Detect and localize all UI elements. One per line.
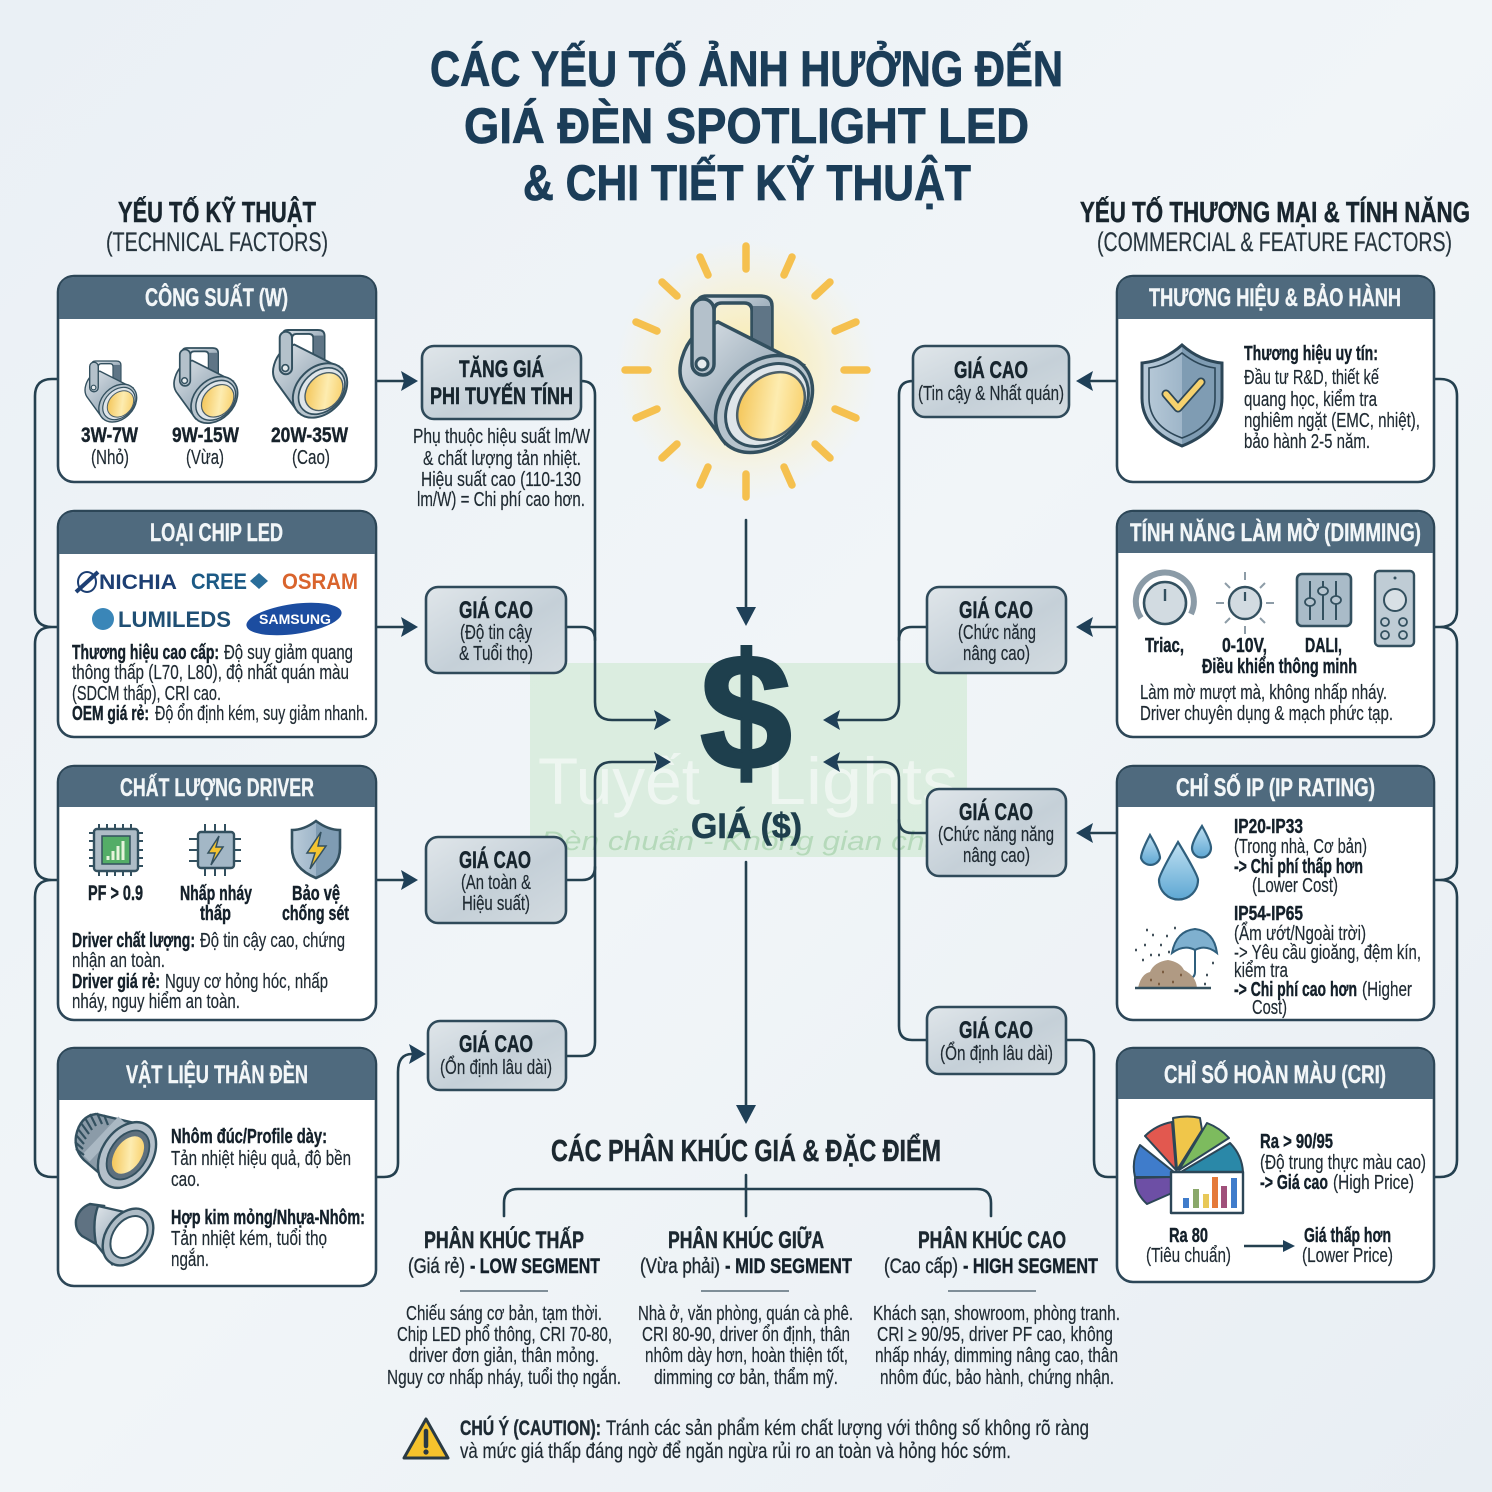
panel header: IP bbox=[1118, 767, 1433, 807]
panel: vật liệu thân đèn bbox=[58, 1048, 376, 1286]
badge: giá cao, chức năng: GIÁ CAO bbox=[959, 596, 1033, 624]
badge: giá cao, chức năng năng: GIÁ CAO bbox=[959, 798, 1033, 826]
IP description: (Ẩm ướt/Ngoài trời) bbox=[1234, 922, 1366, 945]
connector: right panels bus bbox=[1434, 379, 1457, 1177]
segment tree connector bbox=[504, 1175, 991, 1216]
segment: low: Nguy cơ nhấp nháy, tuổi thọ ngắn. bbox=[387, 1366, 621, 1389]
icon: thin alloy body bbox=[76, 1199, 164, 1275]
arrows: right panels to badges bbox=[1076, 371, 1117, 843]
icon: umbrella, dust and mound bbox=[1135, 928, 1217, 988]
wattage labels: (Cao) bbox=[292, 447, 330, 469]
driver description: Driver chất lượng: bbox=[72, 930, 195, 952]
panel: chất lượng driver bbox=[58, 766, 376, 1020]
brand description: Thương hiệu uy tín: bbox=[1244, 343, 1378, 365]
driver description: nhận an toàn. bbox=[72, 950, 165, 972]
heading: commercial and feature factors bbox=[1080, 195, 1470, 257]
badge: giá cao, chức năng năng: (Chức năng năng bbox=[938, 824, 1054, 846]
IP description: Cost) bbox=[1252, 997, 1287, 1019]
text: wattage note: Phụ thuộc hiệu suất lm/W bbox=[413, 426, 590, 448]
brand logos: OSRAM bbox=[282, 569, 358, 594]
icon: small spotlight bbox=[85, 361, 144, 430]
price symbol and label: $ bbox=[700, 620, 792, 804]
segment: low: Chip LED phổ thông, CRI 70-80, bbox=[397, 1324, 612, 1346]
icon: main spotlight with rays bbox=[616, 240, 876, 500]
segment: low: Chiếu sáng cơ bản, tạm thời. bbox=[406, 1303, 602, 1325]
dimming labels bbox=[1145, 635, 1357, 678]
caution text: CHÚ Ý (CAUTION): bbox=[460, 1416, 601, 1440]
icon: die-cast aluminium body bbox=[75, 1111, 168, 1199]
heading: price segments: CÁC PHÂN KHÚC GIÁ & ĐẶC ĐIỂM bbox=[551, 1132, 941, 1168]
segment: high: - HIGH SEGMENT bbox=[963, 1255, 1098, 1278]
brand logos: CREE bbox=[191, 569, 247, 594]
segment: high: PHÂN KHÚC CAO bbox=[918, 1226, 1066, 1254]
panel header: vật liệu: VẬT LIỆU THÂN ĐÈN bbox=[126, 1059, 308, 1089]
material description: Tản nhiệt kém, tuổi thọ bbox=[171, 1228, 327, 1250]
material description: ngắn. bbox=[171, 1248, 209, 1271]
badge: giá cao, chức năng: (Chức năng bbox=[958, 622, 1036, 644]
segment: mid: - MID SEGMENT bbox=[725, 1255, 852, 1278]
wattage labels: 3W-7W bbox=[81, 424, 138, 447]
driver description: Nguy cơ hỏng hóc, nhấp bbox=[165, 971, 328, 993]
dimming description: Làm mờ mượt mà, không nhấp nháy. bbox=[1140, 682, 1387, 704]
price symbol and label bbox=[691, 620, 802, 846]
IP description: (Higher bbox=[1362, 979, 1412, 1001]
IP description: kiểm tra bbox=[1234, 960, 1289, 982]
IP description: -> Yêu cầu gioăng, đệm kín, bbox=[1234, 942, 1421, 964]
driver feature labels: PF > 0.9 bbox=[88, 882, 143, 905]
chip description: (SDCM thấp), CRI cao. bbox=[72, 683, 221, 705]
badge: giá cao, chức năng: nâng cao) bbox=[963, 643, 1030, 665]
CRI description: (Độ trung thực màu cao) bbox=[1260, 1152, 1426, 1174]
badge: giá cao, an toàn bbox=[426, 837, 566, 923]
badge: giá cao, ổn định bbox=[428, 1021, 566, 1090]
panel header: CRI: CHỈ SỐ HOÀN MÀU (CRI) bbox=[1164, 1059, 1386, 1089]
heading: technical factors: (TECHNICAL FACTORS) bbox=[106, 227, 328, 257]
dimming labels: DALI, bbox=[1305, 635, 1342, 657]
Ra 80 comparison: (Lower Price) bbox=[1302, 1245, 1393, 1267]
material description: Tản nhiệt hiệu quả, độ bền bbox=[171, 1148, 351, 1170]
driver description: Driver giá rẻ: bbox=[72, 971, 160, 993]
segment: mid bbox=[638, 1226, 853, 1389]
brand description: bảo hành 2-5 năm. bbox=[1244, 431, 1370, 453]
chip description: Độ suy giảm quang bbox=[224, 642, 353, 664]
panel header: vật liệu bbox=[59, 1049, 375, 1100]
text: wattage note: Hiệu suất cao (110-130 bbox=[421, 469, 581, 491]
segment: high: (Cao cấp) bbox=[884, 1255, 958, 1278]
badge: giá cao, an toàn: (An toàn & bbox=[461, 872, 531, 894]
panel: chỉ số hoàn màu bbox=[1117, 1048, 1434, 1282]
panel: loại chip LED bbox=[58, 511, 376, 737]
badge: giá cao, ổn định: GIÁ CAO bbox=[459, 1030, 533, 1058]
badge: giá cao, ổn định: (Ổn định lâu dài) bbox=[440, 1055, 552, 1079]
segment: mid: CRI 80-90, driver ổn định, thân bbox=[642, 1324, 850, 1346]
icon: surge protection shield bbox=[292, 821, 340, 878]
IP description: -> Chi phí cao hơn bbox=[1234, 979, 1357, 1001]
dimming description: Driver chuyên dụng & mạch phức tạp. bbox=[1140, 703, 1393, 725]
title: GIÁ ĐÈN SPOTLIGHT LED bbox=[464, 98, 1029, 154]
icon: PF chip bbox=[89, 824, 143, 876]
icon: large spotlight bbox=[273, 330, 358, 428]
watermark: Tuyết Lights: Đèn chuẩn - Không gian chất bbox=[541, 826, 953, 856]
icon: shield with check bbox=[1142, 345, 1222, 446]
driver description: nháy, nguy hiểm an toàn. bbox=[72, 991, 240, 1013]
segment: low: (Giá rẻ) bbox=[408, 1255, 465, 1278]
watermark: Tuyết Lights: Tuyết bbox=[538, 744, 700, 818]
badge: tăng giá phi tuyến tính: TĂNG GIÁ bbox=[459, 355, 544, 383]
badge: giá cao, ổn định right: GIÁ CAO bbox=[959, 1016, 1033, 1044]
text: wattage note bbox=[413, 426, 590, 511]
badge: tăng giá phi tuyến tính bbox=[422, 346, 581, 419]
brand description bbox=[1244, 343, 1420, 453]
panel header: CRI bbox=[1118, 1049, 1433, 1099]
IP description: (Trong nhà, Cơ bản) bbox=[1234, 836, 1367, 858]
panel header: driver: CHẤT LƯỢNG DRIVER bbox=[120, 773, 314, 802]
price symbol and label: GIÁ ($) bbox=[691, 806, 802, 846]
caution text: Tránh các sản phẩm kém chất lượng với thông số không rõ ràng bbox=[606, 1417, 1089, 1440]
icon: water drops bbox=[1141, 826, 1211, 900]
badge: giá cao, độ tin cậy: & Tuổi thọ) bbox=[459, 643, 533, 665]
brand logos: NICHIA bbox=[99, 571, 177, 594]
panel header: driver bbox=[59, 767, 375, 807]
arrow: spotlight to price bbox=[736, 520, 756, 626]
title bbox=[430, 40, 1063, 211]
badge: tăng giá phi tuyến tính: PHI TUYẾN TÍNH bbox=[430, 382, 573, 410]
badge: giá cao, tin cậy và nhất quán: (Tin cậy & Nhất quán) bbox=[918, 383, 1064, 405]
badge: giá cao, tin cậy và nhất quán bbox=[913, 346, 1069, 417]
badge: giá cao, độ tin cậy: GIÁ CAO bbox=[459, 596, 533, 624]
chip description: OEM giá rẻ: bbox=[72, 703, 149, 725]
heading: technical factors: YẾU TỐ KỸ THUẬT bbox=[118, 195, 316, 229]
icon: DALI sliders bbox=[1297, 574, 1351, 626]
panel header: thương hiệu bbox=[1118, 277, 1433, 319]
chip description: Thương hiệu cao cấp: bbox=[72, 642, 219, 664]
panel header: loại chip: LOẠI CHIP LED bbox=[150, 519, 283, 547]
panel header: loại chip bbox=[59, 512, 375, 554]
brand logos: LUMILEDS bbox=[118, 607, 231, 632]
badge: giá cao, chức năng năng: nâng cao) bbox=[963, 845, 1030, 867]
badge: giá cao, ổn định right: (Ổn định lâu dài) bbox=[940, 1041, 1053, 1065]
panel: công suất bbox=[58, 276, 376, 482]
wattage labels: 20W-35W bbox=[271, 424, 348, 447]
wattage labels: (Vừa) bbox=[186, 447, 224, 469]
badge: giá cao, chức năng bbox=[927, 587, 1066, 673]
dimming labels: 0-10V, bbox=[1222, 635, 1267, 657]
segment: mid: Nhà ở, văn phòng, quán cà phê. bbox=[638, 1303, 853, 1325]
icon: caution triangle bbox=[404, 1419, 448, 1458]
panel: thương hiệu và bảo hành bbox=[1117, 276, 1434, 482]
brand description: Đầu tư R&D, thiết kế bbox=[1244, 367, 1379, 389]
segment: low: - LOW SEGMENT bbox=[470, 1255, 600, 1278]
caution text: và mức giá thấp đáng ngờ để ngăn ngừa rủi ro an toàn và hỏng hóc sớm. bbox=[460, 1440, 1011, 1463]
segment: mid: dimming cơ bản, thẩm mỹ. bbox=[654, 1367, 838, 1389]
driver feature labels: thấp bbox=[200, 903, 231, 925]
badge: giá cao, ổn định right bbox=[927, 1007, 1066, 1074]
panel header: làm mờ bbox=[1118, 512, 1433, 553]
material description: cao. bbox=[171, 1169, 200, 1191]
segment: high: nhôm đúc, bảo hành, chứng nhận. bbox=[880, 1367, 1114, 1389]
panel header: IP: CHỈ SỐ IP (IP RATING) bbox=[1176, 772, 1375, 802]
badge: giá cao, độ tin cậy: (Độ tin cậy bbox=[460, 622, 532, 644]
wattage labels: 9W-15W bbox=[172, 424, 239, 447]
chip description bbox=[72, 642, 368, 725]
chip description: Độ ổn định kém, suy giảm nhanh. bbox=[155, 703, 368, 725]
driver feature labels: Nhấp nháy bbox=[180, 883, 253, 905]
driver description bbox=[72, 930, 345, 1013]
driver feature labels: chống sét bbox=[282, 903, 349, 925]
heading: technical factors bbox=[106, 195, 328, 257]
icon: low flicker chip bbox=[189, 824, 241, 876]
segment: high bbox=[873, 1226, 1120, 1389]
connectors: left badges to price bbox=[566, 381, 671, 1056]
IP description: (Lower Cost) bbox=[1252, 875, 1338, 897]
wattage labels: (Nhỏ) bbox=[91, 447, 129, 469]
IP description: -> Chi phí thấp hơn bbox=[1234, 856, 1363, 878]
panel header: công suất: CÔNG SUẤT (W) bbox=[145, 282, 288, 312]
brand logos: SAMSUNG bbox=[259, 611, 331, 627]
brand description: quang học, kiểm tra bbox=[1244, 389, 1378, 411]
CRI description: Ra > 90/95 bbox=[1260, 1131, 1333, 1153]
badge: giá cao, chức năng năng bbox=[927, 789, 1066, 876]
connectors: right badges to price bbox=[823, 381, 927, 1040]
Ra 80 comparison: (Tiêu chuẩn) bbox=[1146, 1245, 1231, 1267]
connector: CRI panel to stability badge bbox=[1066, 1040, 1117, 1177]
Ra 80 comparison bbox=[1146, 1225, 1393, 1267]
segment: mid: nhôm dày hơn, hoàn thiện tốt, bbox=[645, 1345, 848, 1367]
text: wattage note: & chất lượng tản nhiệt. bbox=[423, 448, 581, 470]
panel: chỉ số IP bbox=[1117, 766, 1434, 1020]
brand description: nghiêm ngặt (EMC, nhiệt), bbox=[1244, 410, 1420, 432]
Ra 80 comparison: Giá thấp hơn bbox=[1304, 1225, 1391, 1247]
watermark: Tuyết Lights bbox=[530, 663, 967, 857]
IP description: IP20-IP33 bbox=[1234, 816, 1303, 838]
dimming labels: Triac, bbox=[1145, 635, 1184, 657]
CRI description: -> Giá cao bbox=[1260, 1172, 1328, 1194]
brand logos bbox=[76, 569, 358, 641]
material description: Hợp kim mỏng/Nhựa-Nhôm: bbox=[171, 1207, 365, 1229]
segment: high: CRI ≥ 90/95, driver PF cao, không bbox=[877, 1324, 1113, 1346]
IP description: IP54-IP65 bbox=[1234, 903, 1303, 925]
text: wattage note: lm/W) = Chi phí cao hơn. bbox=[417, 489, 585, 511]
material description bbox=[171, 1126, 365, 1271]
icon: Triac knob bbox=[1136, 572, 1194, 624]
title: & CHI TIẾT KỸ THUẬT bbox=[523, 155, 971, 211]
icon: smart remote bbox=[1375, 571, 1414, 646]
segment: low bbox=[387, 1226, 621, 1389]
panel header: thương hiệu: THƯƠNG HIỆU & BẢO HÀNH bbox=[1149, 282, 1401, 312]
driver feature labels: Bảo vệ bbox=[292, 883, 340, 905]
icon: 0-10V knob bbox=[1216, 572, 1274, 634]
connector: left panels bus bbox=[35, 379, 58, 1177]
IP description bbox=[1234, 816, 1421, 1019]
dimming description bbox=[1140, 682, 1393, 725]
wattage labels bbox=[81, 424, 348, 469]
badge: giá cao, an toàn: Hiệu suất) bbox=[462, 893, 530, 915]
segment: mid: (Vừa phải) bbox=[640, 1255, 720, 1278]
Ra 80 comparison: Ra 80 bbox=[1169, 1225, 1208, 1247]
panel header: công suất bbox=[59, 277, 375, 319]
badge: giá cao, an toàn: GIÁ CAO bbox=[459, 846, 531, 874]
CRI description: (High Price) bbox=[1333, 1172, 1414, 1194]
CRI description bbox=[1260, 1131, 1426, 1194]
icon: medium spotlight bbox=[174, 348, 247, 432]
segment: high: nhấp nháy, dimming nâng cao, thân bbox=[875, 1345, 1118, 1367]
segment: mid: PHÂN KHÚC GIỮA bbox=[668, 1226, 824, 1254]
segment: low: driver đơn giản, thân mỏng. bbox=[409, 1345, 599, 1367]
caution text bbox=[460, 1416, 1089, 1463]
panel: tính năng làm mờ bbox=[1117, 511, 1434, 737]
badge: giá cao, tin cậy và nhất quán: GIÁ CAO bbox=[954, 356, 1028, 384]
chip description: thông thấp (L70, L80), độ nhất quán màu bbox=[72, 662, 349, 684]
driver feature labels bbox=[88, 882, 349, 925]
arrow: price to segments bbox=[736, 862, 756, 1124]
watermark: Tuyết Lights: Lights bbox=[766, 744, 958, 818]
title: CÁC YẾU TỐ ẢNH HƯỞNG ĐẾN bbox=[430, 40, 1063, 97]
arrows: left panels to badges bbox=[376, 371, 426, 1177]
segment: high: Khách sạn, showroom, phòng tranh. bbox=[873, 1303, 1120, 1325]
icon: colour fan with bar chart bbox=[1134, 1116, 1243, 1213]
driver description: Độ tin cậy cao, chứng bbox=[200, 930, 345, 952]
dimming labels: Điều khiển thông minh bbox=[1202, 656, 1357, 678]
badge: giá cao, độ tin cậy bbox=[426, 587, 566, 673]
segment: low: PHÂN KHÚC THẤP bbox=[424, 1226, 584, 1254]
material description: Nhôm đúc/Profile dày: bbox=[171, 1126, 327, 1148]
